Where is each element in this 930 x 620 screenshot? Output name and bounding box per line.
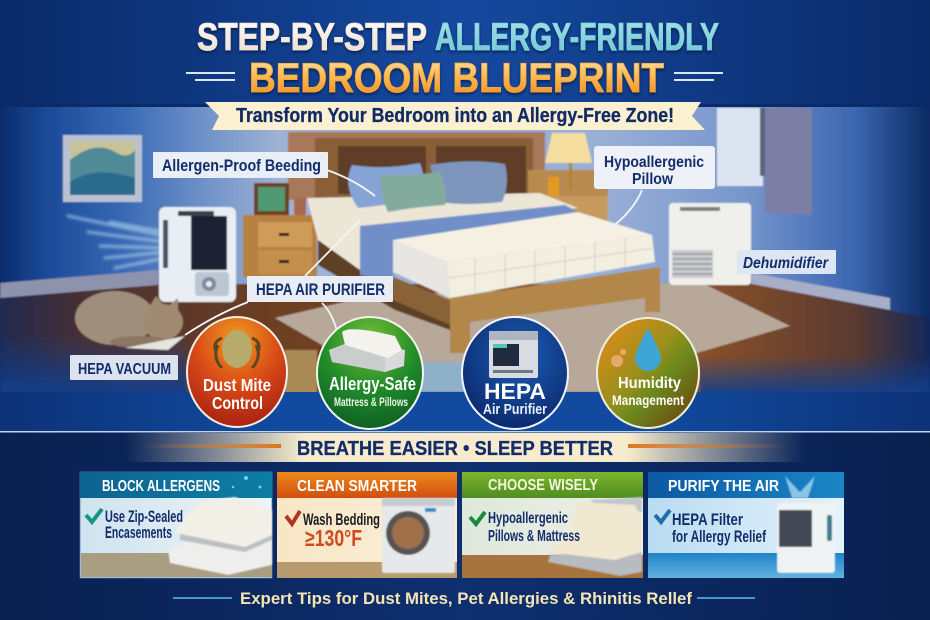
air flow rays [68, 216, 165, 268]
banner: breathe easier, sleep better [60, 433, 870, 462]
card: purify the air: for Allergy Relief [672, 527, 766, 546]
title rules left [186, 73, 235, 80]
wall [0, 105, 930, 330]
icon: check [286, 511, 300, 524]
badge: dust mite control [187, 317, 287, 427]
side rail [393, 277, 450, 325]
badge: hepa air purifier: Air Purifier [483, 402, 547, 418]
mattress left top [307, 193, 578, 270]
left baseboard [0, 270, 158, 298]
card: choose wisely [462, 472, 643, 578]
card: clean smarter: Wash Bedding [303, 511, 380, 529]
card: choose wisely: Hypoallergenic [488, 510, 568, 527]
rug [275, 282, 790, 392]
badge: humidity management [597, 318, 699, 428]
left floor fade [0, 335, 186, 395]
badge: allergy-safe mattress and pillows: Mattress & Pillows [334, 395, 408, 409]
lower blue band [0, 392, 930, 432]
card: choose wisely: CHOOSE WISELY [488, 477, 599, 494]
right nightstand and lamp [528, 133, 608, 220]
label: dehumidifier: Dehumidifier [743, 255, 829, 272]
badge: humidity management: Management [612, 392, 684, 408]
card: block allergens: Encasements [105, 524, 172, 542]
illustration: washing machine [382, 498, 455, 573]
card: purify the air [648, 472, 844, 578]
card: purify the air: HEPA Filter [672, 510, 743, 529]
pillows [348, 161, 507, 212]
headboard [315, 138, 533, 200]
badge: allergy-safe mattress and pillows [317, 317, 423, 429]
icon: sparkle network [232, 476, 262, 488]
card: block allergens: BLOCK ALLERGENS [102, 478, 220, 495]
badge: dust mite control: Dust Mite [203, 375, 271, 395]
wall painting [63, 135, 142, 202]
under bed shadow [318, 240, 450, 330]
badge: allergy-safe mattress and pillows: Allergy-Safe [329, 373, 416, 394]
title line two: BEDROOM BLUEPRINT [249, 54, 664, 101]
label: hepa vacuum [70, 355, 178, 380]
wood wall panel [288, 132, 545, 200]
card: clean smarter: ≥130°F [305, 525, 362, 551]
card: choose wisely: Pillows & Mattress [488, 528, 580, 545]
icon: air purifier machine [489, 331, 538, 378]
label: hepa vacuum: HEPA VACUUM [78, 361, 171, 378]
cat [75, 291, 185, 350]
header band [0, 0, 930, 106]
icon: mattress and pillows [329, 329, 405, 372]
illustration: pillows and mattress [548, 497, 642, 576]
card: purify the air: PURIFY THE AIR [668, 478, 779, 495]
label: hypoallergenic pillow: Hypoallergenic [604, 154, 704, 171]
icon: water drop [635, 328, 661, 371]
mattress top [393, 212, 652, 262]
blue blanket [360, 205, 578, 282]
card: clean smarter: CLEAN SMARTER [297, 478, 417, 495]
title line one aqua: ALLERGY-FRIENDLY [435, 16, 719, 59]
mattress front [447, 235, 655, 298]
badge: humidity management: Humidity [618, 375, 681, 392]
window [717, 108, 765, 186]
illustration: encased mattress [168, 497, 272, 575]
leader lines [185, 170, 642, 345]
left nightstand [243, 183, 317, 277]
illustration: air purifier [777, 476, 835, 573]
badge: hepa air purifier [462, 317, 568, 429]
dehumidifier unit [669, 203, 751, 285]
label: dehumidifier [737, 250, 836, 274]
cardboard on floor [285, 350, 317, 395]
title [197, 16, 719, 101]
badge: hepa air purifier: HEPA [484, 379, 546, 404]
icon: check [86, 509, 102, 522]
wall top shadow [0, 104, 930, 107]
bedroom scene [0, 105, 930, 395]
right floor fade [700, 355, 930, 395]
title line one white: STEP-BY-STEP [197, 16, 427, 59]
label: hepa air purifier [247, 276, 393, 302]
card: block allergens [80, 472, 272, 578]
badge: dust mite control: Control [212, 393, 263, 413]
air purifier unit [159, 207, 236, 302]
label: allergen-proof bedding [153, 152, 328, 178]
subtitle ribbon: Transform Your Bedroom into an Allergy-Free Zone! [236, 105, 674, 127]
icon: check [655, 510, 670, 522]
lower background [0, 432, 930, 620]
front rail and post [450, 267, 660, 353]
label: hepa air purifier: HEPA AIR PURIFIER [256, 281, 385, 299]
card: clean smarter [277, 472, 457, 578]
icon: check [470, 512, 485, 524]
label: allergen-proof bedding: Allergen-Proof Beeding [162, 157, 321, 175]
rug blue patch [420, 362, 465, 392]
icon: dust mite [215, 330, 259, 368]
footer tagline: Expert Tips for Dust Mites, Pet Allergies & Rhinitis Rellef [240, 590, 693, 608]
banner: breathe easier, sleep better: BREATHE EASIER • SLEEP BETTER [297, 437, 613, 460]
curtain [765, 108, 812, 215]
card: block allergens: Use Zip-Sealed [105, 508, 183, 526]
label: hypoallergenic pillow: Pillow [632, 171, 673, 188]
floor [0, 284, 930, 395]
mattress side [393, 240, 450, 298]
label: hypoallergenic pillow [594, 146, 715, 189]
right baseboard [752, 273, 890, 310]
bed [307, 193, 660, 353]
title rules right [674, 73, 723, 80]
icon: orange bubbles [611, 349, 626, 367]
